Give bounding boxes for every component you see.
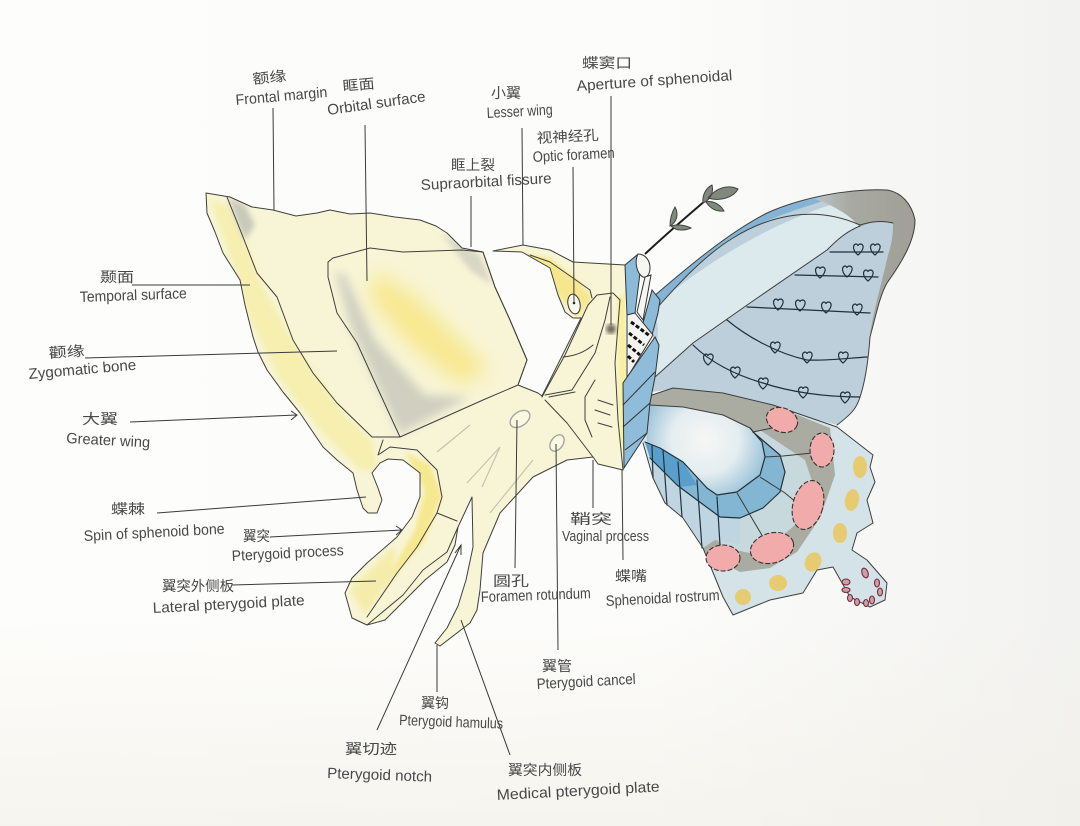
tail spots — [842, 567, 882, 606]
veins with heart marks — [693, 244, 883, 403]
label: orbital surface: 眶面 — [342, 75, 375, 94]
label: medial pterygoid plate — [461, 620, 660, 804]
label: zygomatic bone: 颧缘 — [48, 343, 85, 361]
label: temporal surface: Temporal surface — [80, 285, 187, 306]
label: supraorbital fissure: 眶上裂 — [451, 157, 495, 173]
sphenoid bone half — [206, 193, 627, 646]
colored pencil shading — [210, 197, 627, 615]
label: temporal surface: 颞面 — [100, 269, 134, 285]
label: foramen rotundum: Foramen rotundum — [481, 585, 591, 606]
label: pterygoid canal — [536, 444, 636, 693]
label: frontal margin — [235, 68, 328, 210]
ridge of temporal surface — [227, 197, 400, 437]
label: orbital surface — [326, 75, 427, 281]
yellow spots — [735, 456, 867, 605]
label: frontal margin: 额缘 — [252, 68, 287, 87]
blue ring and stripes — [645, 432, 785, 518]
label: greater wing — [66, 411, 297, 451]
label: sphenoidal rostrum — [605, 470, 720, 610]
label: greater wing: Greater wing — [66, 430, 151, 451]
label: lesser wing: 小翼 — [491, 85, 521, 101]
label: lateral pterygoid plate: Lateral pterygoid plate — [152, 592, 305, 617]
label: pterygoid canal: 翼管 — [542, 658, 572, 674]
label: pterygoid process: Pterygoid process — [231, 542, 344, 565]
label: lesser wing — [486, 85, 553, 245]
inner area of hindwing — [700, 430, 815, 555]
label: foramen rotundum: 圆孔 — [493, 573, 529, 589]
butterfly body — [623, 254, 660, 468]
grey wing apex — [815, 189, 915, 337]
optic foramen — [566, 293, 582, 315]
label: pterygoid hamulus: 翼钩 — [421, 695, 449, 711]
label: medial pterygoid plate: Medical pterygoid plate — [496, 778, 660, 804]
label: foramen rotundum — [481, 420, 591, 606]
grey band of hindwing — [645, 388, 835, 572]
wing and fissure lines — [530, 255, 623, 470]
pterygoid canal opening — [547, 432, 567, 454]
label: pterygoid hamulus: Pterygoid hamulus — [399, 712, 503, 733]
label: vaginal process: Vaginal process — [562, 528, 649, 545]
pencil sketch marks — [437, 425, 533, 513]
label: pterygoid hamulus — [399, 645, 503, 733]
pterygoid hook inner line — [367, 440, 442, 617]
label: spine of sphenoid bone: Spin of sphenoid bone — [83, 521, 225, 545]
hindwing — [643, 388, 887, 615]
label: vaginal process: 鞘突 — [570, 511, 612, 527]
pale cell — [645, 405, 765, 495]
label: medial pterygoid plate: 翼突内侧板 — [508, 762, 582, 778]
label: pterygoid notch: Pterygoid notch — [327, 765, 432, 786]
label: frontal margin: Frontal margin — [235, 84, 328, 109]
label: aperture of sphenoidal: 蝶窦口 — [582, 55, 632, 71]
label: pterygoid process: 翼突 — [243, 528, 270, 544]
forewing — [653, 189, 915, 425]
label: temporal surface — [80, 269, 250, 306]
label: pterygoid notch — [327, 545, 461, 786]
label: greater wing: 大翼 — [82, 411, 118, 427]
bone silhouette — [206, 193, 627, 646]
label: pterygoid canal: Pterygoid cancel — [536, 671, 636, 693]
label: sphenoidal rostrum: 蝶嘴 — [615, 568, 647, 584]
pale veined band below ring — [650, 458, 740, 548]
label: supraorbital fissure — [420, 157, 552, 247]
label: supraorbital fissure: Supraorbital fissure — [420, 170, 552, 194]
label: zygomatic bone — [28, 343, 337, 383]
label: lesser wing: Lesser wing — [486, 102, 553, 122]
orbital surface plate — [328, 248, 527, 437]
bone outline — [206, 193, 625, 646]
label: spine of sphenoid bone: 蝶棘 — [111, 501, 145, 517]
label: zygomatic bone: Zygomatic bone — [28, 357, 137, 383]
label: lateral pterygoid plate — [152, 578, 376, 617]
label: spine of sphenoid bone — [83, 497, 366, 545]
label: optic foramen — [532, 127, 615, 303]
label: optic foramen: Optic foramen — [532, 145, 615, 166]
lateral plate lower edge — [367, 513, 458, 625]
dark aperture spot — [606, 324, 616, 334]
foramen rotundum — [507, 407, 533, 431]
label: lateral pterygoid plate: 翼突外侧板 — [162, 578, 234, 594]
label: aperture of sphenoidal — [576, 55, 733, 325]
label: orbital surface: Orbital surface — [326, 88, 427, 119]
label: pterygoid notch: 翼切迹 — [345, 741, 397, 757]
blue costal band — [653, 195, 840, 309]
label: aperture of sphenoidal: Aperture of sphenoidal — [576, 67, 733, 95]
label: optic foramen: 视神经孔 — [536, 127, 599, 146]
label: sphenoidal rostrum: Sphenoidal rostrum — [605, 587, 720, 610]
label: pterygoid process — [231, 526, 402, 565]
pink spots — [706, 403, 834, 571]
butterfly half — [623, 185, 915, 615]
pale basal area of forewing — [655, 205, 860, 377]
branch with leaves — [645, 185, 738, 254]
label: vaginal process — [562, 460, 649, 545]
